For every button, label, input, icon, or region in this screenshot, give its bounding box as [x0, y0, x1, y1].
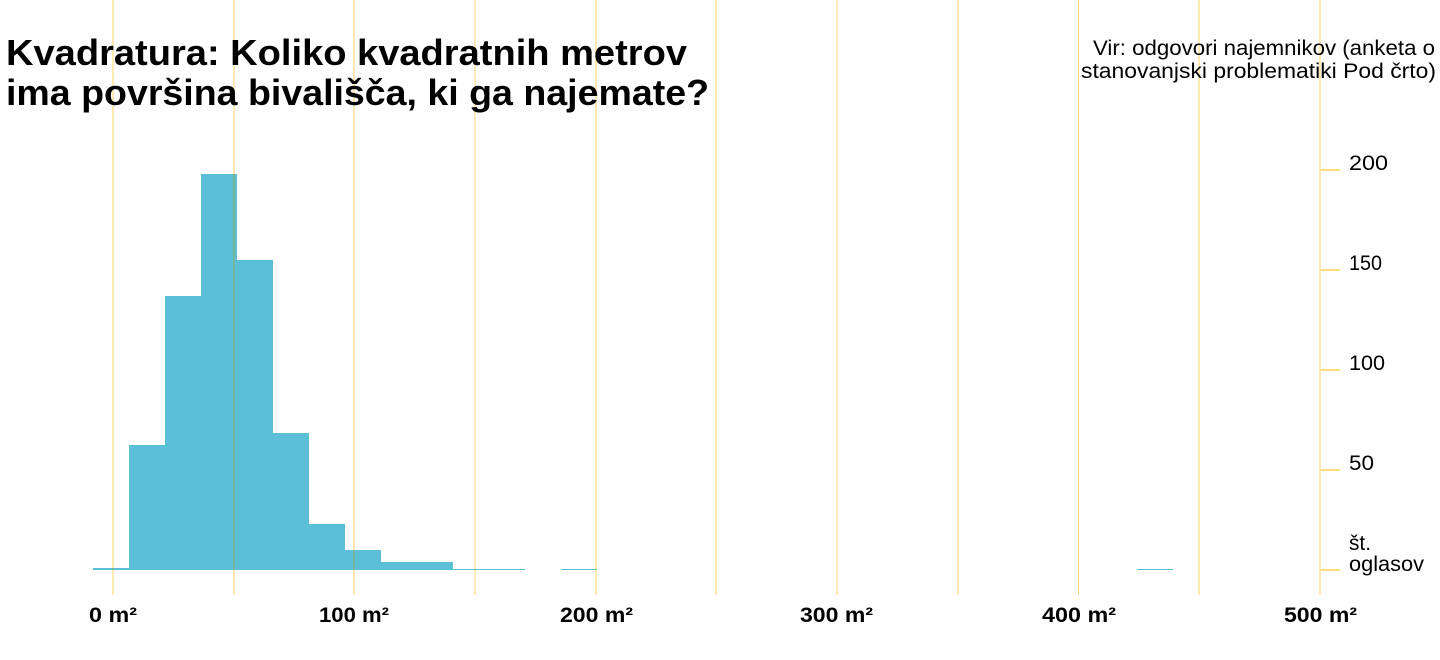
x-axis labels: 200 m²: [560, 604, 633, 627]
y-axis tick marks: [1320, 169, 1340, 571]
vertical grid lines: [112, 0, 1321, 595]
source note: [1081, 37, 1436, 83]
x-axis labels: 400 m²: [1042, 604, 1116, 627]
y-axis labels: 200: [1349, 152, 1388, 175]
title: [6, 32, 709, 113]
source note: Vir: odgovori najemnikov (anketa o: [1093, 37, 1435, 60]
y-axis labels: [1349, 152, 1425, 576]
x-axis labels: 300 m²: [800, 604, 873, 627]
source note: stanovanjski problematiki Pod črto): [1081, 60, 1436, 83]
x-axis labels: [89, 604, 1357, 627]
y-axis labels: 50: [1349, 452, 1374, 475]
grid lines over bars: [112, 174, 597, 570]
y-axis labels: 100: [1349, 352, 1385, 375]
x-axis labels: 0 m²: [89, 604, 137, 627]
histogram bars: [93, 174, 1173, 570]
x-axis labels: 100 m²: [319, 604, 389, 627]
y-axis labels: oglasov: [1349, 553, 1425, 576]
title: Kvadratura: Koliko kvadratnih metrov: [6, 32, 687, 73]
y-axis labels: 150: [1349, 252, 1382, 275]
x-axis labels: 500 m²: [1284, 604, 1357, 627]
y-axis labels: št.: [1349, 532, 1371, 555]
title: ima površina bivališča, ki ga najemate?: [6, 72, 709, 113]
